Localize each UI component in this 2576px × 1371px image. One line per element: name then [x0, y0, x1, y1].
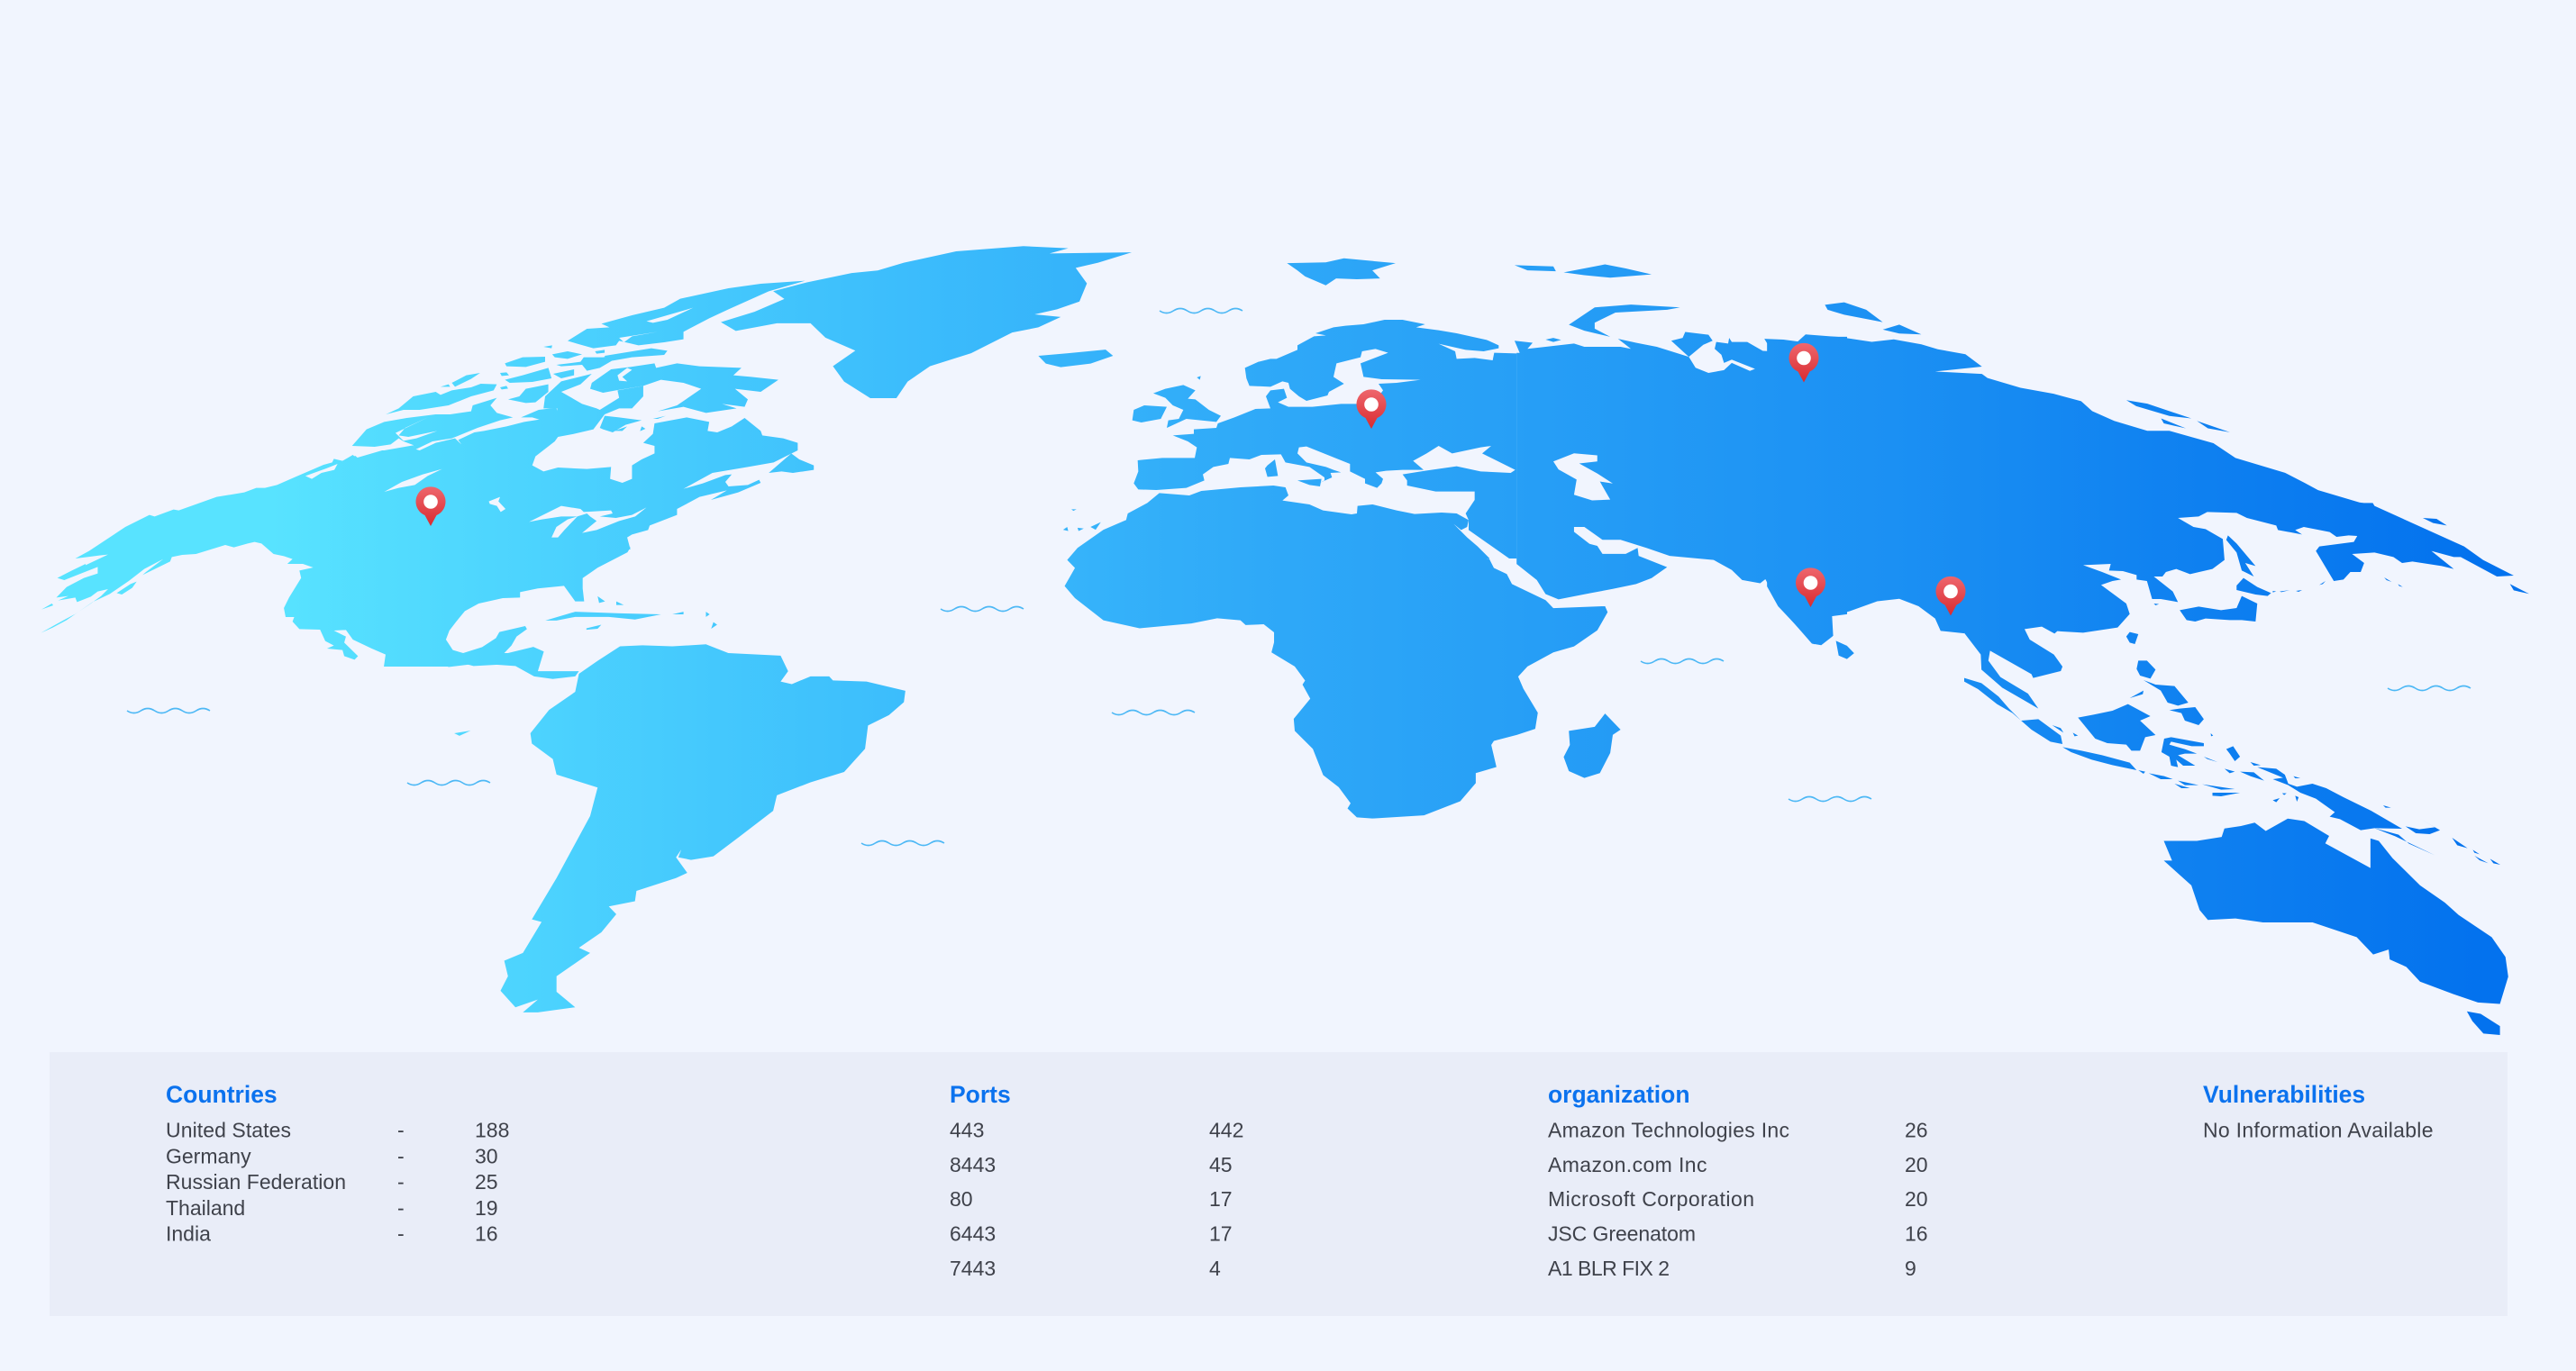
- list: country counts: [166, 1119, 509, 1245]
- list: port counts: 443: [950, 1119, 984, 1142]
- map pin: India: [1796, 567, 1825, 607]
- list: organization counts: [1548, 1119, 1928, 1280]
- Novaya Zemlya: [1569, 304, 1680, 337]
- Kolguev Island: [1545, 338, 1561, 342]
- list: organization counts: 20: [1905, 1187, 1928, 1211]
- Southampton Island: [600, 416, 666, 432]
- Mediterranean islands: [1265, 459, 1322, 486]
- Europe and the Levant: [1133, 320, 1516, 558]
- Australia: [2164, 819, 2508, 1003]
- heading: Countries: Countries: [166, 1081, 278, 1108]
- text: no information: No Information Available: [2203, 1119, 2433, 1142]
- column: ports: [950, 1081, 1243, 1280]
- panel: statistics: [50, 1052, 2508, 1316]
- list: country counts: -: [397, 1170, 405, 1194]
- Sulawesi: [2162, 737, 2204, 767]
- Arctic archipelago: [352, 281, 806, 449]
- list: port counts: 17: [1209, 1187, 1233, 1211]
- list: port counts: 4: [1209, 1257, 1221, 1280]
- Melanesian and north Pacific islands: [2272, 518, 2500, 865]
- list: port counts: [950, 1119, 1243, 1280]
- Sri Lanka: [1836, 640, 1854, 659]
- list: port counts: 442: [1209, 1119, 1243, 1142]
- list: port counts: 6443: [950, 1221, 996, 1245]
- Siberia and inner Asia: [1767, 334, 2373, 644]
- Caribbean islands: [454, 596, 717, 736]
- Africa south of the Sahara: [1065, 520, 1607, 819]
- Philippines: [2130, 660, 2204, 725]
- map pin: Russian Federation: [1789, 343, 1818, 382]
- list: port counts: 45: [1209, 1153, 1233, 1176]
- list: country counts: Germany: [166, 1144, 251, 1167]
- north Africa: [1126, 486, 1489, 558]
- world map: [41, 246, 2529, 1035]
- list: country counts: -: [397, 1221, 405, 1245]
- China, Southeast Asia and the Russian Far East: [1964, 503, 2514, 709]
- landmass: Americas south, Greenland and Iceland: [448, 246, 1132, 1012]
- landmass: Alaska and western North America: [41, 450, 527, 667]
- New Guinea: [2257, 767, 2435, 855]
- Sumatra: [1964, 678, 2063, 744]
- landmass: northern and central Asia: [1767, 303, 2529, 1035]
- map pin: Thailand: [1935, 577, 1966, 616]
- eastern seaboard: [515, 547, 631, 602]
- list: organization counts: Amazon Technologies Inc: [1548, 1119, 1789, 1142]
- list: organization counts: 20: [1905, 1153, 1928, 1176]
- list: country counts: 25: [475, 1170, 498, 1194]
- list: port counts: 8443: [950, 1153, 996, 1176]
- western and central Asia: [1515, 331, 1847, 645]
- heading: organization: organization: [1548, 1081, 1690, 1108]
- list: country counts: -: [397, 1144, 405, 1167]
- list: organization counts: A1 BLR FIX 2: [1548, 1257, 1670, 1280]
- ocean waves: [127, 308, 2471, 845]
- list: country counts: Russian Federation: [166, 1170, 346, 1194]
- Canadian mainland: [342, 374, 797, 549]
- list: country counts: 30: [475, 1144, 498, 1167]
- Japan: [2153, 578, 2271, 622]
- landmass: East and Southeast Asia: [1964, 503, 2514, 865]
- list: country counts: 19: [475, 1196, 498, 1220]
- Sakhalin and Kuril islands: [2226, 535, 2326, 593]
- Baffin Island: [590, 363, 778, 413]
- Iceland: [1038, 350, 1113, 368]
- British Isles: [1133, 376, 1221, 428]
- Madagascar: [1563, 713, 1621, 778]
- Svalbard: [1287, 259, 1396, 286]
- list: port counts: 17: [1209, 1221, 1233, 1245]
- heading: Vulnerabilities: Vulnerabilities: [2203, 1081, 2365, 1108]
- Newfoundland: [769, 453, 814, 473]
- map pin: Germany: [1357, 389, 1386, 429]
- list: country counts: -: [397, 1119, 405, 1142]
- Aleutian islands: [41, 582, 137, 610]
- list: country counts: 16: [475, 1221, 498, 1245]
- landmass: Canada and eastern United States: [305, 281, 814, 549]
- list: country counts: United States: [166, 1119, 291, 1142]
- list: port counts: 80: [950, 1187, 973, 1211]
- list: country counts: 188: [475, 1119, 509, 1142]
- landmass: Europe and north Africa: [1126, 320, 1516, 558]
- Borneo: [2073, 704, 2155, 750]
- Greenland: [721, 246, 1132, 398]
- Siberian islands: [1825, 303, 2529, 594]
- list: organization counts: Microsoft Corporation: [1548, 1187, 1754, 1211]
- heading: Ports: Ports: [950, 1081, 1011, 1108]
- column: vulnerabilities: [2203, 1081, 2433, 1142]
- list: organization counts: JSC Greenatom: [1548, 1221, 1696, 1245]
- list: country counts: Thailand: [166, 1196, 245, 1220]
- list: country counts: India: [166, 1221, 211, 1245]
- list: organization counts: Amazon.com Inc: [1548, 1153, 1707, 1176]
- Canary Islands: [1063, 509, 1101, 531]
- list: organization counts: 16: [1905, 1221, 1928, 1245]
- Moluccas: [2204, 733, 2300, 781]
- South America: [500, 644, 906, 1012]
- Tasmania: [2467, 1012, 2500, 1035]
- list: country counts: -: [397, 1196, 405, 1220]
- landmass: central Asia, southern Africa and Arctic islands: [1063, 259, 1847, 819]
- Franz Josef Land: [1515, 264, 1652, 277]
- Central America: [448, 647, 579, 679]
- list: organization counts: 9: [1905, 1257, 1916, 1280]
- Taiwan: [2126, 632, 2138, 644]
- column: organization: [1548, 1081, 1928, 1280]
- Java and the Lesser Sunda Islands: [2062, 747, 2240, 796]
- lakes and channels: [305, 308, 693, 538]
- map pin: United States: [416, 486, 445, 526]
- list: port counts: 7443: [950, 1257, 996, 1280]
- list: organization counts: 26: [1905, 1119, 1928, 1142]
- Alaska, western Canada and western United States: [41, 450, 527, 667]
- column: countries: [166, 1081, 509, 1245]
